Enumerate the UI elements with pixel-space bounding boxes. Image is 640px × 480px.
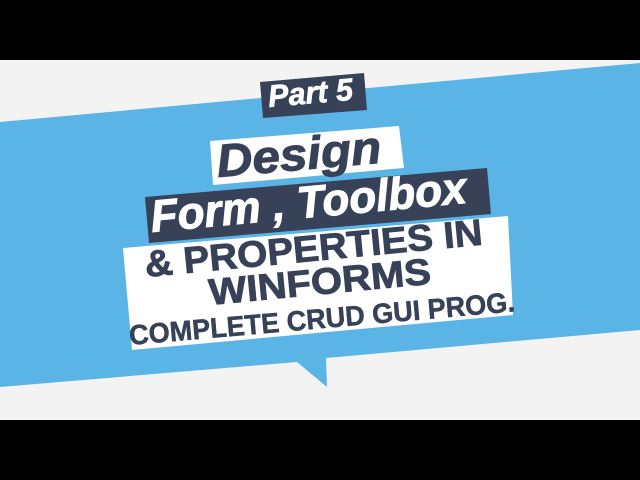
subtitle line: COMPLETE CRUD GUI PROG.: COMPLETE CRUD GUI PROG. bbox=[128, 286, 516, 351]
speech bubble bbox=[0, 63, 640, 387]
subtitle line: WINFORMS: WINFORMS bbox=[207, 251, 433, 313]
badge: Part 5: Part 5 bbox=[267, 72, 355, 114]
background: paper panel bbox=[0, 60, 640, 420]
subtitle line: & PROPERTIES IN: & PROPERTIES IN bbox=[143, 212, 484, 285]
heading: Form , Toolbox: Form , Toolbox bbox=[148, 162, 470, 242]
panel: subtitle text bbox=[123, 212, 516, 351]
heading: Design: Design bbox=[214, 121, 383, 187]
